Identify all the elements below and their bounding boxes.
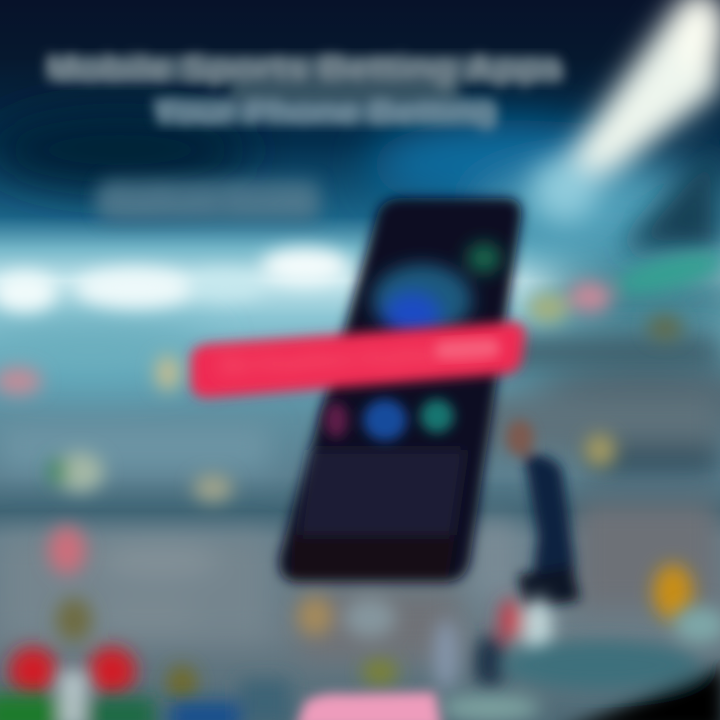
heading xyxy=(45,49,565,131)
field and bottom foreground xyxy=(0,607,720,720)
pink panel, bottom centre xyxy=(295,692,442,720)
person silhouette xyxy=(506,420,580,610)
heading: Your Phone Betting xyxy=(152,93,498,131)
phone screen blobs xyxy=(372,243,501,337)
subheading: Stadium Guide xyxy=(95,186,315,219)
coloured crowd flags and balloons xyxy=(0,245,720,701)
red banner: Bet Anywhere Anytime Now xyxy=(219,336,491,380)
smartphone xyxy=(279,198,521,582)
stadium light beam, top right xyxy=(531,0,720,250)
bright clouds band xyxy=(0,248,349,312)
heading: Mobile Sports Betting Apps xyxy=(45,49,565,88)
crowd stands texture xyxy=(0,335,720,660)
red banner xyxy=(190,322,525,398)
